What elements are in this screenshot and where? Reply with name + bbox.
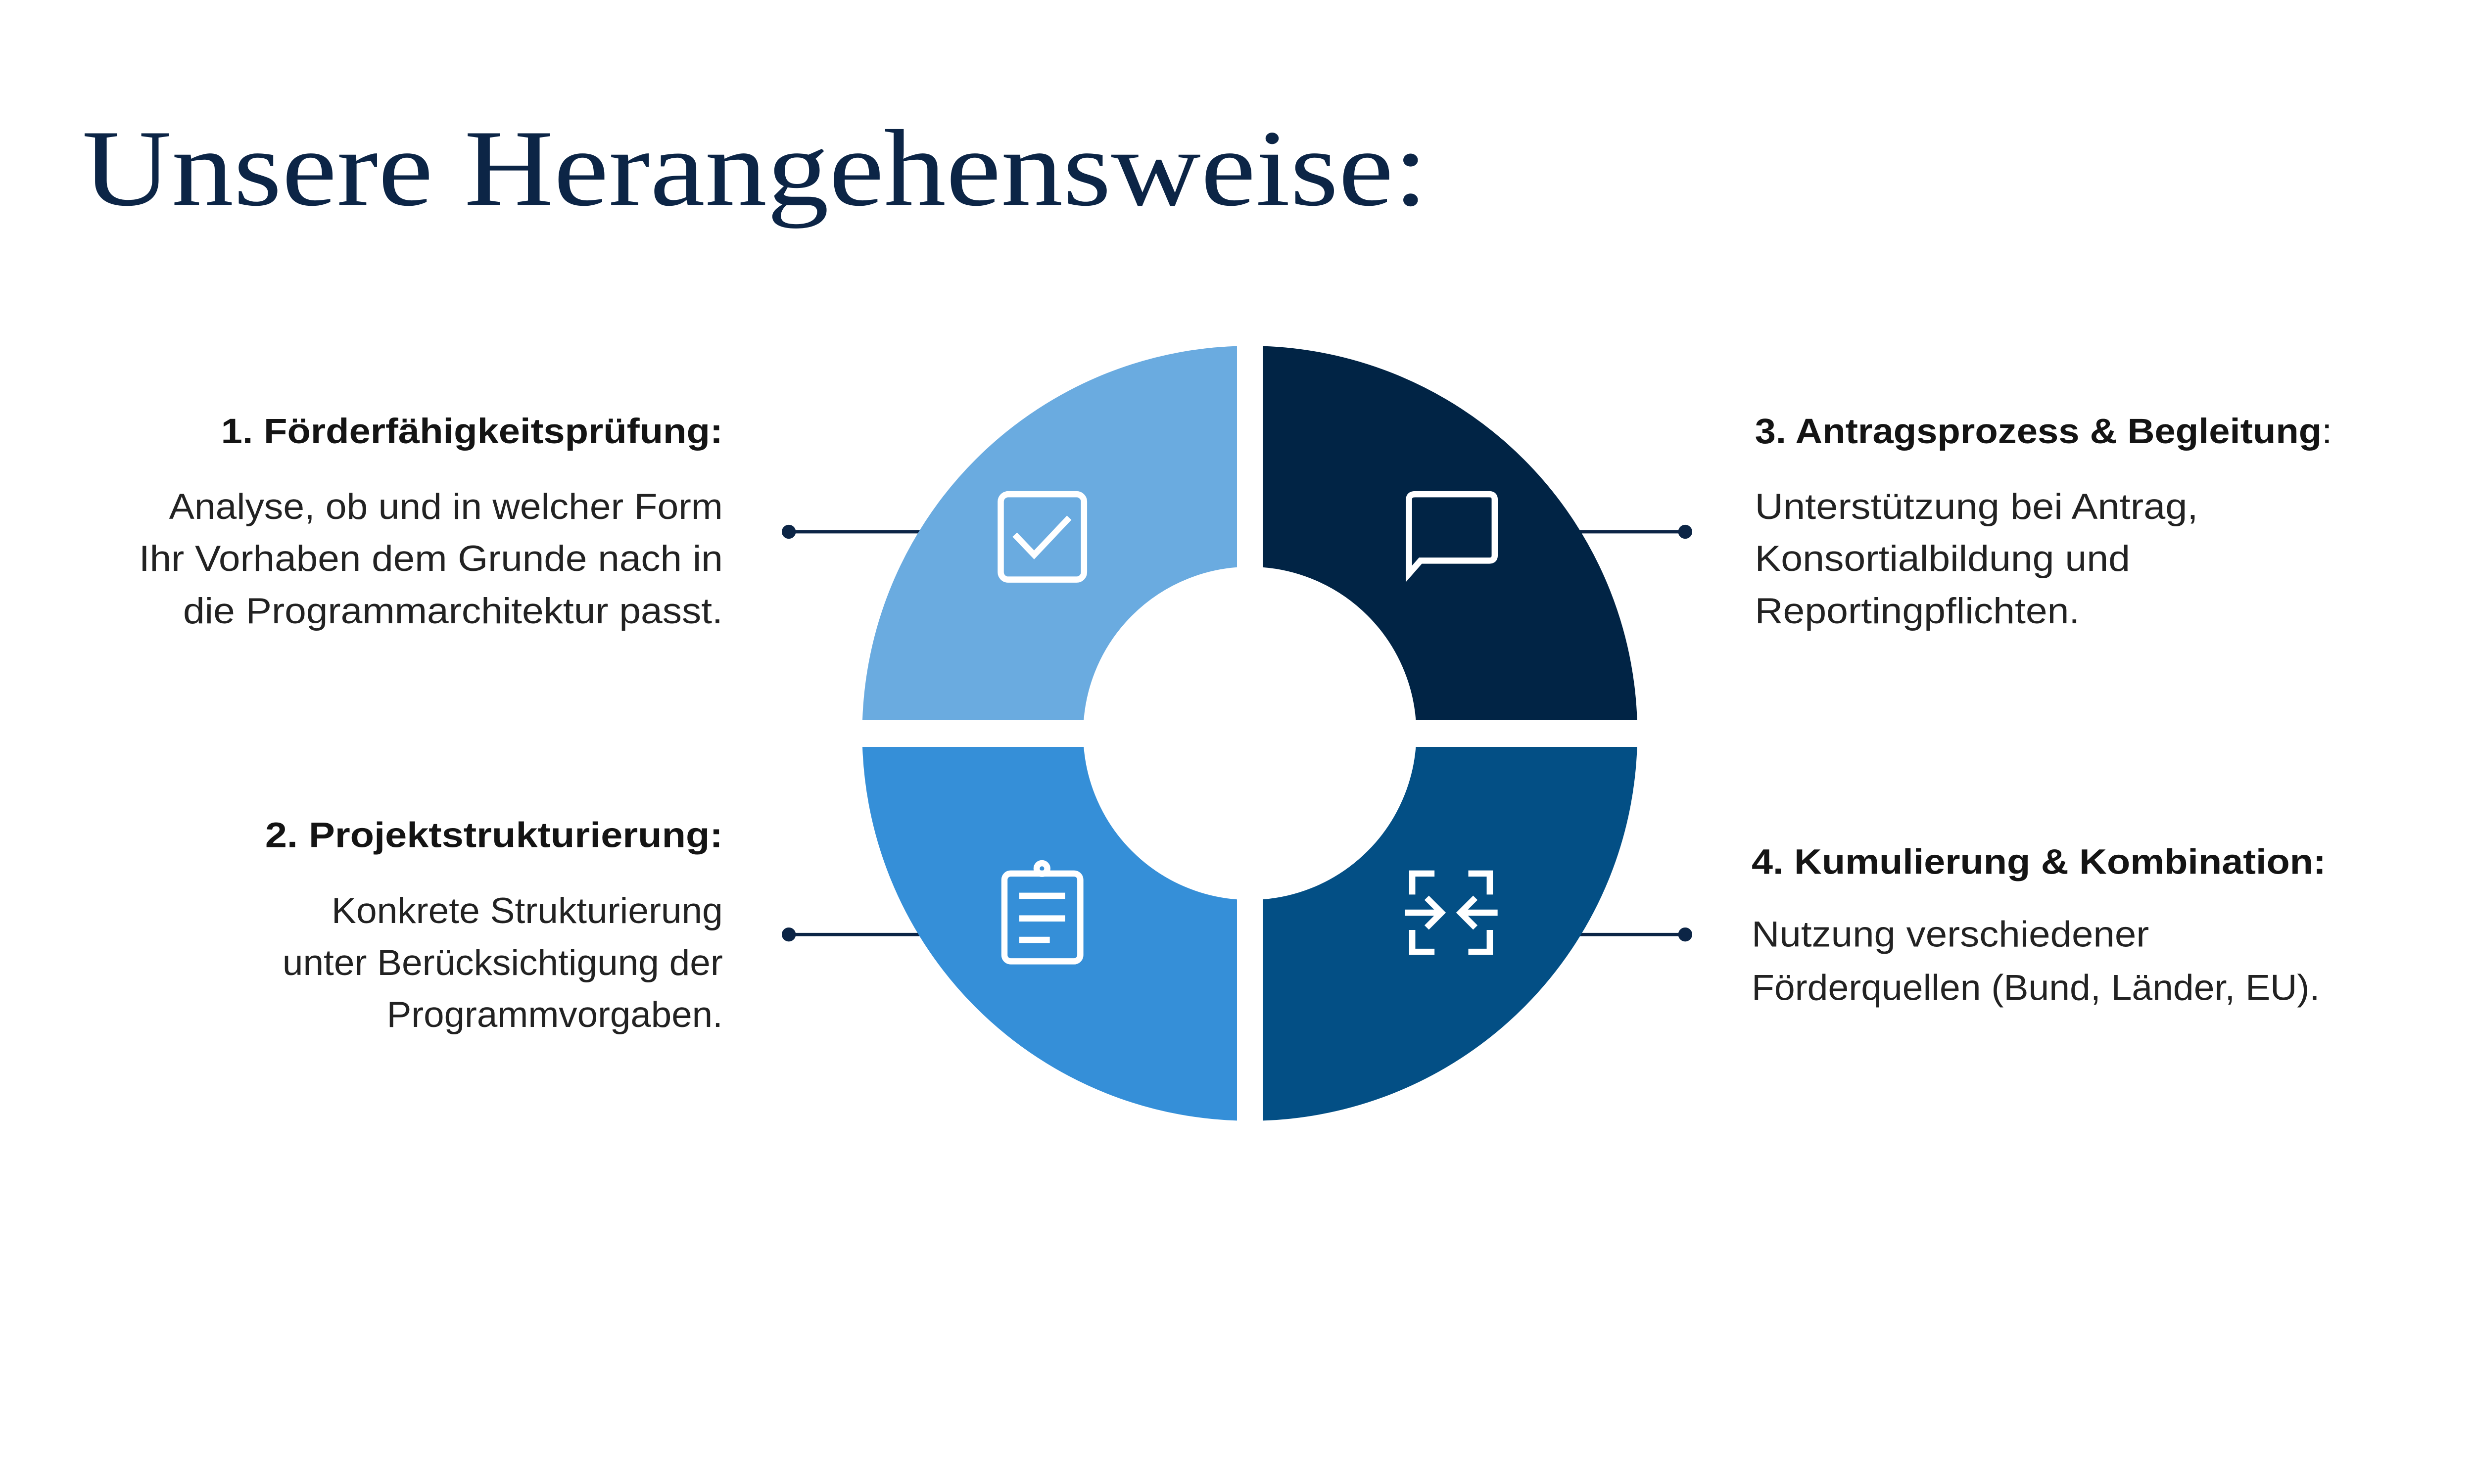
- text block: step 2: Programmvorgaben.: [387, 994, 723, 1035]
- text block: step 4: Nutzung verschiedener: [1752, 914, 2149, 954]
- text block: step 2: [265, 815, 723, 1035]
- icon: checkbox: [1000, 494, 1084, 580]
- text block: step 2: Konkrete Strukturierung: [332, 890, 723, 931]
- text block: step 3: 3. Antragsprozess & Begleitung :: [1755, 412, 2332, 451]
- ring chart: [973, 456, 1527, 1010]
- text block: step 1: [139, 412, 723, 631]
- text block: step 1: die Programmarchitektur passt.: [183, 591, 723, 631]
- icon: speech bubble: [1409, 494, 1495, 574]
- text block: step 3: Unterstützung bei Antrag,: [1755, 486, 2198, 527]
- icon: clipboard: [1004, 863, 1080, 961]
- segment 2: [862, 747, 1237, 1121]
- text block: step 3: Reportingpflichten.: [1755, 591, 2080, 631]
- text block: step 4: 4. Kumulierung & Kombination:: [1752, 842, 2326, 882]
- text block: step 2: unter Berücksichtigung der: [283, 942, 723, 983]
- text block: step 3: [1755, 412, 2332, 631]
- text block: step 1: Analyse, ob und in welcher Form: [169, 486, 723, 527]
- title: Unsere Herangehensweise:: [82, 107, 1428, 229]
- segment 3: [1263, 346, 1637, 720]
- icon: combine arrows: [1405, 874, 1498, 952]
- text block: step 4: Förderquellen (Bund, Länder, EU).: [1752, 968, 2320, 1008]
- segment 1: [862, 346, 1237, 720]
- text block: step 1: Ihr Vorhaben dem Grunde nach in: [139, 538, 723, 579]
- text block: step 3: Konsortialbildung und: [1755, 538, 2130, 579]
- segment 4: [1263, 747, 1637, 1121]
- text block: step 2: 2. Projektstrukturierung:: [265, 816, 723, 855]
- connector lines: [783, 526, 1691, 940]
- text block: step 4: [1752, 842, 2326, 1008]
- text block: step 1: 1. Förderfähigkeitsprüfung:: [221, 412, 723, 451]
